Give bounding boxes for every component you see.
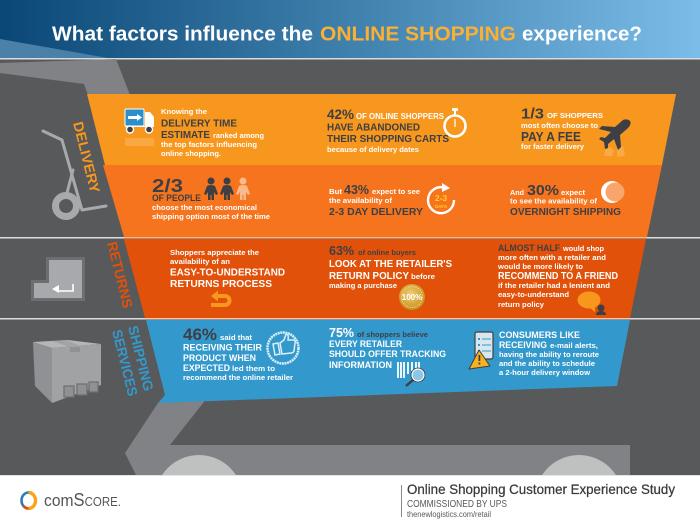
dark background panel — [0, 58, 700, 475]
text: 46% receiving product: PRODUCT WHEN — [183, 353, 256, 364]
text: 42% abandoned: because of delivery dates — [327, 145, 419, 154]
text: consumers like: a 2-hour delivery window — [499, 368, 590, 377]
text: two thirds of people: 2/3 — [152, 176, 183, 196]
heading: shipping services: SHIPPING — [125, 324, 157, 393]
text: consumers like: CONSUMERS LIKE — [499, 330, 580, 341]
title — [52, 22, 642, 46]
text: delivery time estimate: ESTIMATE — [161, 130, 210, 141]
panel: delivery lower band — [103, 165, 662, 237]
text: 43% two to three day delivery — [329, 182, 423, 218]
title: experience? — [522, 22, 642, 46]
icon: satisfaction badge — [399, 284, 425, 310]
text: returns process: availability of an — [170, 257, 230, 266]
text: one third pay a fee: 1/3 — [521, 106, 544, 123]
icon: delivery truck — [125, 109, 154, 146]
heading: returns: RETURNS — [104, 240, 136, 310]
text: almost half recommend: if the retailer had a lenient and — [498, 281, 611, 290]
text: consumers like: and the ability to schedule — [499, 359, 595, 368]
text: 43% two to three day delivery: 43% — [344, 182, 369, 197]
text: almost half recommend: would be more likely to — [497, 262, 583, 271]
text: almost half recommend: would shop — [562, 244, 604, 253]
text: 75% tracking information: INFORMATION — [329, 360, 392, 371]
heading: shipping services: SERVICES — [109, 328, 141, 398]
text: 30% overnight shipping: OVERNIGHT SHIPPING — [510, 207, 621, 218]
text: 63% return policy: of online buyers — [358, 248, 416, 257]
text: 63% return policy — [329, 243, 452, 290]
title: ONLINE SHOPPING — [320, 22, 516, 46]
text: 75% tracking information: of shoppers believe — [357, 330, 428, 339]
footer divider — [401, 485, 402, 517]
text: comScore wordmark: comSCORE. — [44, 490, 121, 510]
text: almost half recommend: return policy — [498, 300, 545, 309]
icon: return arrow — [211, 290, 230, 305]
text: consumers like — [499, 330, 599, 377]
panel: returns band — [124, 239, 646, 318]
text: two thirds of people: choose the most economical — [152, 203, 257, 212]
text: 63% return policy: before — [411, 272, 435, 281]
text: almost half recommend: easy-to-understand — [498, 290, 569, 299]
text: 46% receiving product — [183, 325, 293, 382]
text: 42% abandoned: THEIR SHOPPING CARTS — [327, 134, 449, 145]
text: delivery time estimate: online shopping. — [161, 149, 221, 158]
text: delivery time estimate: Knowing the — [161, 107, 207, 116]
text: 43% two to three day delivery: But — [329, 187, 343, 196]
text: 42% abandoned: 42% — [327, 106, 355, 122]
text: 43% two to three day delivery: 2-3 DAY DELIVERY — [329, 207, 423, 218]
text: one third pay a fee — [521, 106, 603, 151]
text: two thirds of people: shipping option most of the time — [152, 212, 270, 221]
header banner — [0, 0, 700, 58]
icon: circular arrow 2-3 days — [428, 183, 454, 213]
text: 63% return policy: LOOK AT THE RETAILER'S — [329, 259, 452, 270]
text: two thirds of people: OF PEOPLE — [152, 193, 201, 203]
text: 63% return policy: 63% — [329, 243, 354, 258]
text: consumers like: RECEIVING — [499, 340, 547, 351]
text: 43% two to three day delivery: expect to see — [372, 187, 420, 196]
icon: barcode with magnifier — [398, 362, 425, 386]
text: one third pay a fee: OF SHOPPERS — [547, 111, 603, 120]
panel: shipping services band — [146, 320, 630, 403]
text: almost half recommend — [497, 243, 618, 309]
text: 75% tracking information: SHOULD OFFER TRACKING — [329, 349, 446, 360]
icon: circular arrow 2-3 days: DAYS — [435, 204, 447, 209]
text: 30% overnight shipping: to see the availability of — [510, 196, 598, 206]
text: delivery time estimate: DELIVERY TIME — [161, 118, 237, 129]
icon: comScore logo mark — [22, 492, 36, 508]
heading: shipping services — [109, 324, 157, 398]
text: 42% abandoned: HAVE ABANDONED — [327, 123, 420, 134]
text: 42% abandoned: OF ONLINE SHOPPERS — [356, 112, 444, 121]
text: 75% tracking information: EVERY RETAILER — [329, 339, 402, 350]
panel: delivery top band — [87, 94, 676, 165]
text: consumers like: e-mail alerts, — [550, 341, 598, 350]
text: delivery time estimate — [161, 107, 264, 158]
text: 46% receiving product: EXPECTED — [183, 363, 230, 374]
icon: satisfaction badge: 100% — [402, 293, 422, 302]
text: one third pay a fee: PAY A FEE — [521, 129, 581, 144]
icon: thumbs up badge — [268, 332, 298, 364]
icon: moon — [601, 181, 624, 203]
text: 30% overnight shipping — [510, 182, 621, 218]
text: study credits — [407, 481, 675, 519]
icon: airplane — [599, 119, 631, 157]
text: 42% abandoned — [327, 106, 449, 154]
icon: stopwatch — [444, 108, 466, 136]
text: returns process: EASY-TO-UNDERSTAND — [170, 268, 285, 279]
text: delivery time estimate: the top factors influencing — [161, 140, 257, 149]
text: 46% receiving product: RECEIVING THEIR — [183, 343, 262, 354]
text: study credits: Online Shopping Customer Experience Study — [407, 481, 675, 497]
text: almost half recommend: ALMOST HALF — [498, 243, 560, 254]
text: two thirds of people — [152, 176, 270, 221]
text: 46% receiving product: 46% — [183, 325, 217, 344]
text: almost half recommend: more often with a retailer and — [498, 253, 606, 262]
text: 46% receiving product: recommend the online retailer — [183, 373, 293, 382]
text: 30% overnight shipping: And — [510, 188, 524, 197]
icon: cardboard box — [33, 340, 101, 403]
text: consumers like: having the ability to reroute — [499, 350, 599, 359]
text: 75% tracking information: 75% — [329, 325, 354, 340]
text: one third pay a fee: for faster delivery — [521, 142, 585, 151]
heading: delivery: DELIVERY — [70, 120, 103, 195]
text: 63% return policy: making a purchase — [329, 281, 397, 290]
title: What factors influence the — [52, 22, 313, 46]
icon: clipboard and warning sign — [469, 332, 493, 369]
text: returns process: RETURNS PROCESS — [170, 279, 272, 290]
text: 30% overnight shipping: expect — [561, 188, 586, 197]
text: study credits: thenewlogistics.com/retail — [407, 510, 491, 519]
text: 46% receiving product: said that — [220, 333, 253, 342]
icon: return key — [31, 257, 85, 301]
text: returns process — [170, 248, 285, 290]
icon: three people — [204, 178, 250, 200]
icon: circular arrow 2-3 days: 2-3 — [435, 193, 447, 203]
text: 43% two to three day delivery: the availability of — [329, 196, 393, 205]
text: 30% overnight shipping: 30% — [527, 182, 559, 199]
text: 46% receiving product: led them to — [232, 364, 276, 373]
text: 63% return policy: RETURN POLICY — [329, 271, 409, 282]
text: 75% tracking information — [329, 325, 446, 371]
text: almost half recommend: RECOMMEND TO A FRIEND — [498, 271, 618, 282]
text: one third pay a fee: most often choose to — [521, 121, 598, 130]
text: returns process: Shoppers appreciate the — [170, 248, 259, 257]
icon: hand truck — [43, 131, 106, 216]
icon: speech bubble with person — [578, 292, 606, 315]
text: delivery time estimate: ranked among — [213, 131, 264, 140]
separator lines — [0, 237, 700, 238]
text: study credits: COMMISSIONED BY UPS — [407, 498, 507, 510]
